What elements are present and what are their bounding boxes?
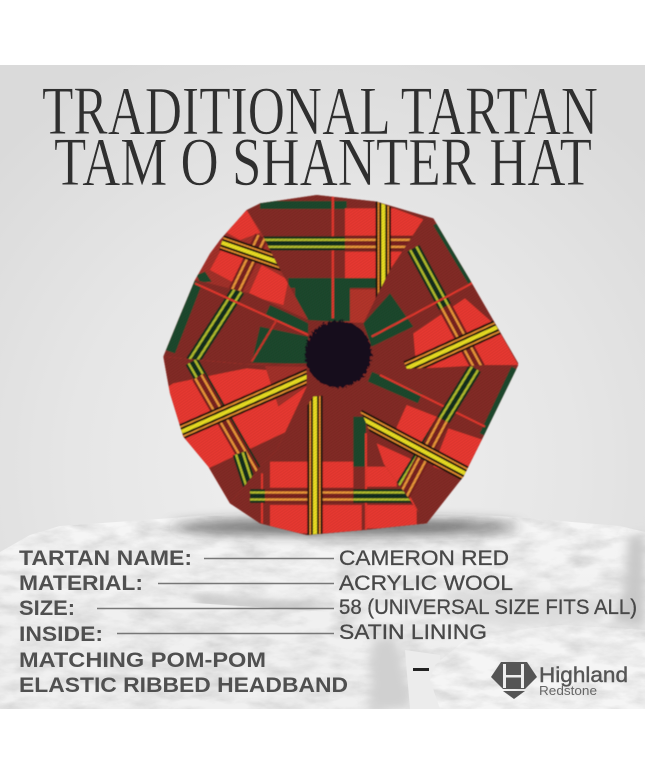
logo wordmark: Highland	[539, 664, 628, 687]
hat panel: upper right	[363, 218, 518, 370]
logo subtitle: Redstone	[539, 683, 597, 698]
spec: size: SIZE:	[19, 597, 75, 620]
rock plinth	[0, 516, 645, 709]
spec: inside: SATIN LINING	[339, 621, 487, 644]
spec: inside	[19, 621, 487, 646]
hat panel: top	[260, 194, 424, 324]
hat panel: left dark	[164, 280, 309, 364]
spec: material: MATERIAL:	[19, 572, 143, 595]
spec: material: ACRYLIC WOOL	[339, 572, 513, 595]
logo: Highland Redstone	[491, 662, 628, 699]
spec: tartan name: CAMERON RED	[339, 547, 509, 570]
spec: material	[19, 572, 513, 595]
tartan hat	[162, 194, 519, 536]
hat base	[163, 195, 518, 535]
spec: size	[19, 596, 637, 620]
spec: inside: INSIDE:	[19, 623, 103, 646]
hat panel: bottom	[230, 395, 424, 536]
spec: pom-pom: MATCHING POM-POM	[19, 649, 266, 672]
hat shadow	[170, 519, 520, 535]
fabric weave	[160, 193, 522, 537]
logo icon	[491, 662, 537, 699]
spec: tartan name	[19, 547, 509, 570]
spec list	[19, 547, 637, 697]
spec: tartan name: TARTAN NAME:	[19, 547, 192, 570]
hat panel: lower right	[360, 364, 519, 521]
spec: size: 58 (UNIVERSAL SIZE FITS ALL)	[339, 596, 637, 619]
hat panel: upper left fold	[195, 210, 308, 320]
title	[42, 73, 598, 200]
pom-pom	[305, 321, 372, 387]
hat panel: lower left	[163, 356, 308, 504]
spec: headband: ELASTIC RIBBED HEADBAND	[19, 674, 348, 697]
